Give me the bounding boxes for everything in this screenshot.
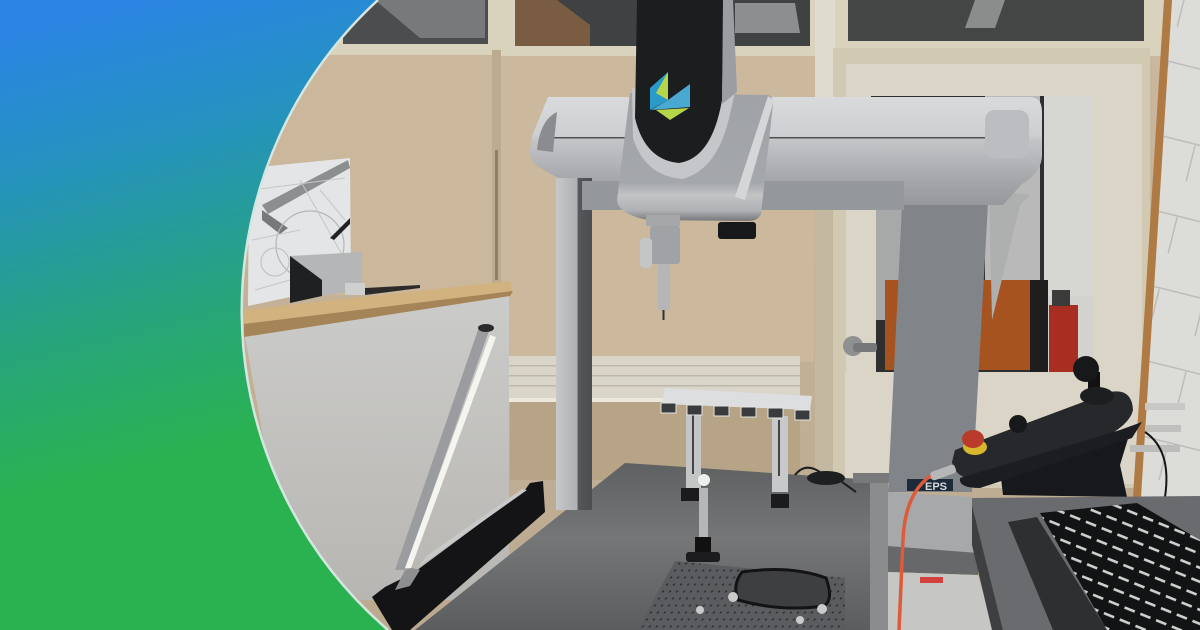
joystick controller [929, 356, 1142, 497]
panel edge highlight [242, 0, 388, 630]
louvered vent strip [509, 356, 800, 402]
icon: blue and green logo [650, 72, 690, 120]
lamp black base [372, 481, 545, 630]
machine table [415, 463, 889, 630]
keyboard desk [972, 496, 1200, 630]
wall panels [270, 50, 814, 480]
crossbeam [530, 97, 1042, 210]
door [815, 48, 1150, 488]
EPS label: EPS [925, 481, 947, 493]
wall air fittings [1130, 403, 1185, 497]
black z-column [635, 0, 737, 163]
calibration sphere stand [686, 474, 720, 562]
probe head [640, 215, 680, 320]
leaning lamp [395, 324, 496, 570]
wooden ledge [243, 281, 513, 337]
door handle [843, 336, 877, 356]
poster with caliper drawing [248, 158, 351, 306]
left leg [556, 178, 592, 510]
fixture plate [637, 561, 845, 630]
carriage head [617, 88, 774, 221]
half wall [244, 296, 509, 600]
monitor [290, 252, 420, 303]
probe rack [661, 388, 812, 508]
camera under head [718, 222, 756, 239]
back wall [240, 0, 1200, 630]
machine base and paper [888, 479, 994, 630]
red cable [899, 473, 935, 630]
brick wall with wood trim [1133, 0, 1200, 497]
coiled cable [795, 468, 856, 492]
upper windows and frames [330, 0, 1170, 100]
gradient panel [0, 0, 388, 630]
right leg [888, 185, 1030, 492]
keyboard [1040, 503, 1200, 630]
